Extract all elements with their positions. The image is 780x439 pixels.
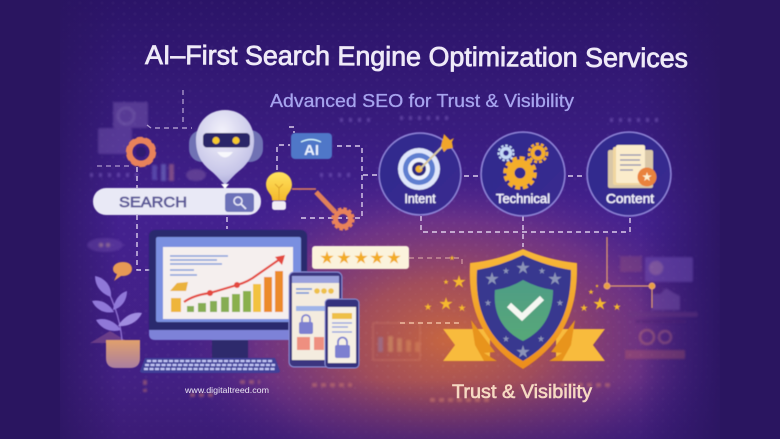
icon: target [398,134,454,190]
ribbon [443,320,605,361]
circle: technical: Technical [496,192,550,206]
icon: check mark [509,298,542,317]
connector with nodes, right [604,237,655,308]
title: AI–First Search Engine Optimization Services [145,40,688,73]
subtitle: Advanced SEO for Trust & Visibility [270,91,574,111]
faded background tech icons [87,102,698,400]
icon: orange target gear [127,138,155,166]
icon: AI badge [291,133,332,159]
artwork [90,110,671,373]
icon: documents with medal [608,145,656,188]
circle: content [587,132,671,216]
shield badge with ribbon [443,249,605,369]
icon: potted plant [90,276,142,368]
star rating card [312,246,409,269]
icon: robot [189,110,263,189]
icon: AI badge: AI [304,142,319,159]
dashed connector lines [97,90,630,323]
trust and visibility label: Trust & Visibility [452,382,593,403]
circle: intent: Intent [404,192,436,206]
circle: technical [481,132,565,216]
icon: speech bubble [113,262,132,281]
keyboard [140,358,280,373]
circle: content: Content [606,192,655,206]
icon: light bulb [266,172,292,210]
circle: intent [379,133,461,215]
chart screen [163,247,293,319]
icon: gears [498,144,547,188]
icon: wrench and gear [292,189,354,230]
website url: www.digitaltreed.com [184,385,269,395]
gold stars around shield [424,255,621,311]
monitor [149,230,307,358]
small phone [325,299,359,368]
large phone [289,272,342,367]
search bar [93,188,261,215]
search bar: SEARCH [119,194,187,211]
